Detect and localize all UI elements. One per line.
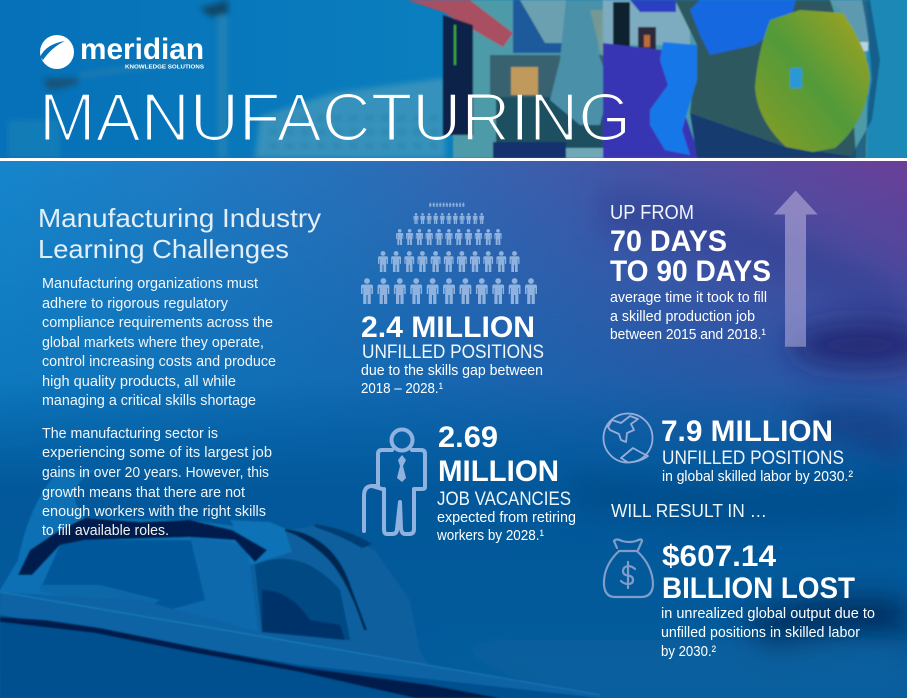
left column heading: Manufacturing Industry	[38, 203, 321, 233]
stat: 2.4 million unfilled positions: 2018 – 2028.¹	[361, 380, 443, 397]
stat: $607.14 billion lost: BILLION LOST	[662, 572, 855, 605]
left column paragraph 2: enough workers with the right skills	[42, 504, 266, 520]
stat: 2.4 million unfilled positions	[361, 311, 544, 397]
stat: $607.14 billion lost: by 2030.²	[661, 643, 716, 660]
white divider	[0, 158, 907, 161]
icon: retiring worker with cane	[364, 430, 425, 534]
left column heading	[38, 203, 321, 264]
stat: up from 70 days to 90 days: 70 DAYS	[610, 225, 727, 258]
arrow: up	[774, 190, 818, 347]
stat: 2.69 million job vacancies: JOB VACANCIES	[437, 489, 571, 510]
stat: up from 70 days to 90 days	[610, 202, 771, 343]
left column paragraph 2: The manufacturing sector is	[42, 426, 218, 442]
stat: 2.69 million job vacancies: workers by 2028.¹	[436, 527, 544, 544]
left column paragraph 1: Manufacturing organizations must	[42, 276, 258, 292]
stat: 7.9 million unfilled positions	[661, 415, 853, 485]
left column paragraph 1: adhere to rigorous regulatory	[42, 296, 229, 312]
left column paragraph 1: global markets where they operate,	[42, 335, 264, 351]
header photo background	[0, 0, 907, 158]
stat: up from 70 days to 90 days: a skilled production job	[610, 308, 755, 325]
icon: money bag	[604, 540, 653, 597]
stat: 7.9 million unfilled positions: UNFILLED POSITIONS	[662, 448, 844, 469]
icon: pyramid of people	[361, 203, 537, 304]
stat: 2.4 million unfilled positions: UNFILLED POSITIONS	[362, 342, 544, 363]
stat: 2.69 million job vacancies: MILLION	[438, 455, 559, 488]
left column paragraph 1: high quality products, all while	[42, 374, 236, 390]
icon: globe	[604, 414, 652, 462]
stat: up from 70 days to 90 days: TO 90 DAYS	[610, 255, 771, 288]
stat: up from 70 days to 90 days: UP FROM	[610, 202, 694, 224]
stat: up from 70 days to 90 days: average time it took to fill	[610, 289, 767, 306]
title: MANUFACTURING	[39, 80, 631, 156]
left column paragraph 2: to fill available roles.	[42, 523, 169, 539]
logo: meridian knowledge solutions	[40, 33, 204, 70]
stat: $607.14 billion lost: in unrealized global output due to	[661, 605, 875, 622]
body background	[0, 158, 907, 698]
stat: 7.9 million unfilled positions: 7.9 MILLION	[661, 415, 833, 448]
left column heading: Learning Challenges	[38, 234, 289, 264]
logo: meridian knowledge solutions: KNOWLEDGE SOLUTIONS	[125, 64, 204, 70]
left column paragraph 2	[42, 426, 272, 539]
left column paragraph 2: experiencing some of its largest job	[42, 445, 272, 461]
logo: meridian knowledge solutions: meridian	[80, 33, 204, 66]
stat: $607.14 billion lost: $607.14	[662, 540, 776, 573]
left column paragraph 1: managing a critical skills shortage	[42, 393, 256, 409]
transition text: WILL RESULT IN …	[611, 500, 767, 521]
stat: up from 70 days to 90 days: between 2015 and 2018.¹	[610, 326, 766, 343]
stat: 2.69 million job vacancies: 2.69	[438, 421, 498, 454]
stat: 2.69 million job vacancies: expected from retiring	[437, 509, 576, 526]
stat: $607.14 billion lost	[661, 540, 875, 660]
left column paragraph 1: compliance requirements across the	[42, 315, 273, 331]
left column paragraph 1	[42, 276, 276, 409]
workers photo	[407, 0, 907, 158]
left column paragraph 2: gains in over 20 years. However, this	[42, 465, 269, 481]
stat: 7.9 million unfilled positions: in global skilled labor by 2030.²	[662, 468, 853, 485]
left column paragraph 1: control increasing costs and produce	[42, 354, 276, 370]
left column paragraph 2: growth means that there are not	[42, 485, 245, 501]
stat: 2.69 million job vacancies	[436, 421, 576, 544]
stat: 2.4 million unfilled positions: 2.4 MILLION	[361, 311, 535, 344]
stat: $607.14 billion lost: unfilled positions in skilled labor	[661, 624, 860, 641]
crane and building	[8, 0, 445, 158]
background photo: hard hat on ledge	[0, 470, 600, 698]
stat: 2.4 million unfilled positions: due to the skills gap between	[361, 362, 543, 379]
